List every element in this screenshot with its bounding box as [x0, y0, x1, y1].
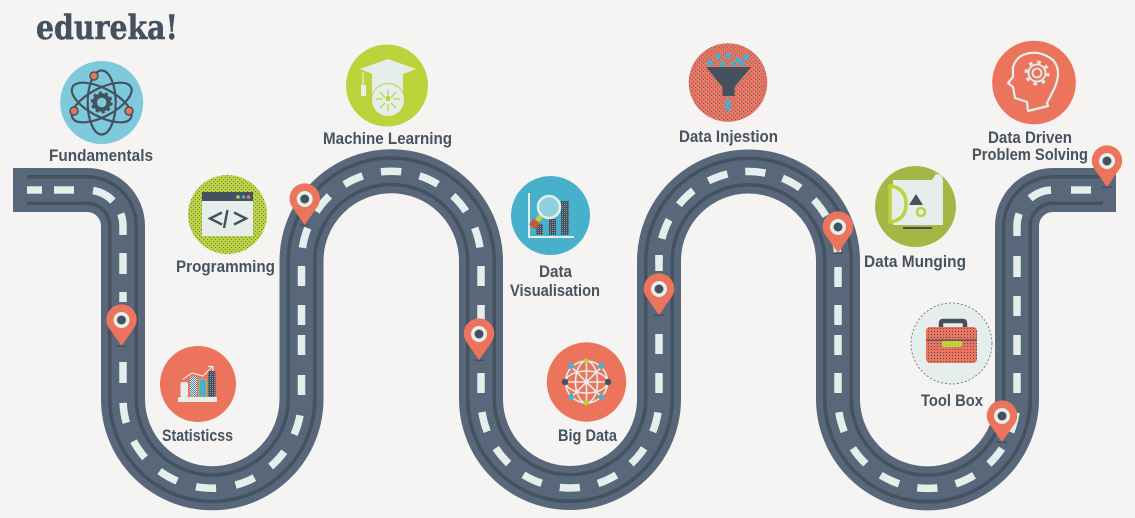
label: Statisticss: Statisticss: [162, 427, 233, 445]
panel: Data Driven Problem Solving: [972, 41, 1088, 164]
logo: edureka!: edureka!: [36, 8, 178, 48]
label: Data Visualisation: Data: [539, 263, 573, 281]
pin 6: [987, 400, 1017, 443]
label: Data Injestion: Data Injestion: [679, 128, 778, 146]
pin 5: [823, 211, 853, 254]
label: Fundamentals: Fundamentals: [49, 147, 153, 165]
panel: Tool Box: [911, 303, 992, 410]
icon: magnifier over chart: [511, 176, 590, 255]
panel: Statisticss: [160, 346, 236, 445]
panel: Machine Learning: [323, 44, 452, 148]
label: Programming: Programming: [176, 258, 275, 276]
icon: atom: [60, 61, 143, 144]
label: Tool Box: Tool Box: [921, 392, 984, 410]
label: Data Munging: Data Munging: [864, 253, 966, 271]
panel: Data Munging: [864, 166, 966, 271]
icon: network globe: [547, 342, 626, 422]
panel: Data Injestion: [679, 43, 778, 146]
pin 4: [644, 273, 674, 316]
road centre dashes: [27, 171, 1091, 488]
winding road: [13, 171, 1116, 488]
pin 7: [1092, 145, 1122, 188]
label: Data Visualisation: Visualisation: [510, 282, 600, 300]
icon: blueprint tools: [875, 166, 956, 247]
panel: Big Data: [547, 342, 626, 445]
pin 3: [464, 318, 494, 361]
icon: toolbox: [911, 303, 992, 384]
icon: code window: [188, 175, 267, 254]
icon: graduation cap with brain: [346, 44, 428, 126]
label: Data Driven Problem Solving: [972, 129, 1088, 164]
panel: Fundamentals: [49, 61, 153, 165]
panel: Programming: [176, 175, 275, 276]
pin 2: [290, 183, 320, 226]
panel: Data Visualisation: [510, 176, 600, 300]
label: Data Driven Problem Solving: Problem Solving: [972, 146, 1088, 164]
label: Machine Learning: Machine Learning: [323, 130, 452, 148]
icon: head with gear: [992, 41, 1076, 124]
label: Data Driven Problem Solving: Data Driven: [988, 129, 1072, 147]
icon: bar chart: [160, 346, 236, 422]
label: Big Data: Big Data: [558, 427, 618, 445]
pin 1: [106, 304, 137, 347]
label: Data Visualisation: [510, 263, 600, 300]
icon: funnel: [689, 43, 767, 122]
